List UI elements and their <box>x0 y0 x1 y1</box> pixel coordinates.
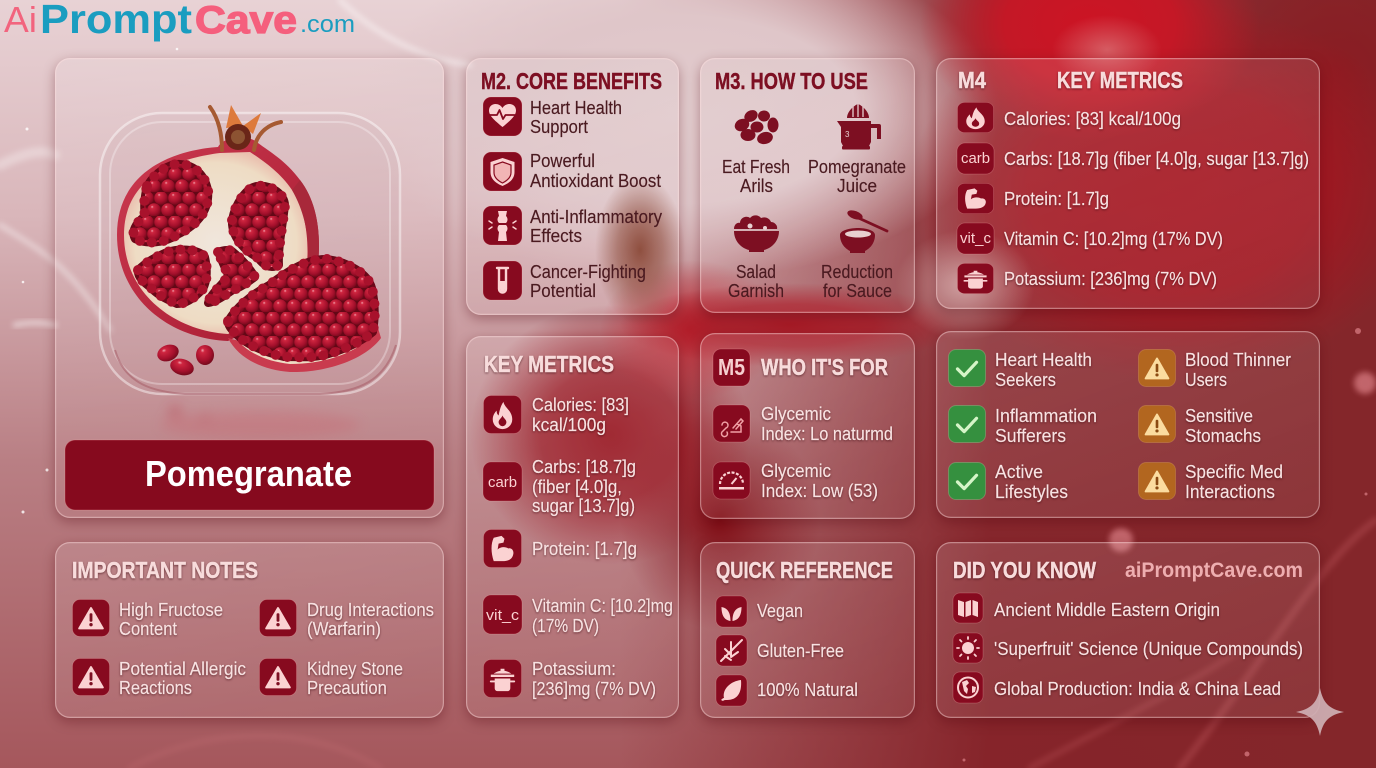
metric: vitamin c <box>483 595 673 636</box>
panel: key metrics column <box>466 336 679 718</box>
metric: calories: kcal/100g <box>532 414 606 435</box>
fact: global production <box>953 672 1281 703</box>
panel: how to use <box>700 58 915 313</box>
heading with badge: WHO IT'S FOR <box>761 354 888 380</box>
use: fresh arils: Eat Fresh <box>722 156 790 177</box>
heading: DID YOU KNOW <box>953 557 1096 583</box>
fact: global production: Global Production: India & China Lead <box>994 678 1281 699</box>
metric: calories: Calories: [83] kcal/100g <box>1004 108 1181 129</box>
heading: M4 <box>958 67 986 93</box>
use: salad: Garnish <box>728 280 784 301</box>
logo: Ai <box>4 0 37 40</box>
heading: M3. HOW TO USE <box>715 68 868 94</box>
note: allergic <box>72 658 246 698</box>
metric: carbs: Carbs: [18.7]g (fiber [4.0]g, sugar [13.7]g) <box>1004 148 1309 169</box>
metric: carbs <box>957 143 1309 174</box>
heading: QUICK REFERENCE <box>716 557 893 583</box>
metric: carbs: Carbs: [18.7]g <box>532 456 636 477</box>
item: glycemic index naturmd: Index: Lo naturmd <box>761 423 893 444</box>
use: fresh arils: Arils <box>740 175 773 196</box>
metric: potassium: Potassium: [236]mg (7% DV) <box>1004 268 1217 289</box>
metric: vitamin c: vit_c <box>486 608 519 624</box>
metric: vitamin c <box>957 223 1223 254</box>
use: salad <box>728 215 784 301</box>
use: juice: Juice <box>837 175 877 196</box>
metric: carbs: sugar [13.7]g) <box>532 495 635 516</box>
benefit: antioxidant: Powerful <box>530 150 595 171</box>
caution: blood thinner users <box>1138 349 1291 390</box>
fact: superfruit: 'Superfruit' Science (Unique Compounds) <box>994 638 1303 659</box>
good for: inflammation sufferers <box>948 405 1097 446</box>
heading <box>958 67 1183 93</box>
heading with badge: M5 <box>718 354 745 380</box>
caution: sensitive stomachs: Sensitive <box>1185 405 1253 426</box>
item: glycemic index low <box>713 460 878 501</box>
use: reduction sauce: for Sauce <box>823 280 892 301</box>
use: juice: Pomegranate <box>808 156 906 177</box>
benefit: antioxidant <box>483 150 661 191</box>
item: glycemic index naturmd: Glycemic <box>761 403 831 424</box>
name bar: Pomegranate <box>145 453 352 494</box>
metric: carbs: (fiber [4.0]g, <box>532 476 622 497</box>
benefit: anti-inflammatory: Anti-Inflammatory <box>530 206 663 227</box>
good for: active lifestyles: Lifestyles <box>995 481 1068 502</box>
metric: potassium: [236]mg (7% DV) <box>532 678 656 699</box>
good for: inflammation sufferers: Inflammation <box>995 405 1097 426</box>
note: fructose <box>72 599 223 639</box>
use: reduction sauce: Reduction <box>821 261 893 282</box>
benefit: heart health: Heart Health <box>530 97 622 118</box>
heading: KEY METRICS <box>484 351 614 377</box>
panel: key metrics top right <box>936 58 1320 309</box>
logo: Cave <box>195 0 297 42</box>
heading: M2. CORE BENEFITS <box>481 68 662 94</box>
note: fructose: High Fructose <box>119 599 223 620</box>
panel: core benefits <box>466 58 679 315</box>
note: kidney stone <box>259 658 403 698</box>
100% natural <box>716 675 858 706</box>
note: allergic: Potential Allergic <box>119 658 246 679</box>
caution: specific med interactions <box>1138 461 1283 502</box>
metric: potassium: Potassium: <box>532 658 616 679</box>
benefit: cancer-fighting <box>483 261 646 301</box>
panel: hero pomegranate <box>55 58 444 518</box>
vegan: Vegan <box>757 600 803 621</box>
metric: protein <box>483 529 637 568</box>
metric: carbs: carb <box>488 475 517 491</box>
panel: did you know <box>936 542 1320 718</box>
note: drug interactions <box>259 599 434 639</box>
benefit: anti-inflammatory <box>483 206 663 246</box>
note: kidney stone: Kidney Stone <box>307 658 403 679</box>
note: kidney stone: Precaution <box>307 677 387 698</box>
metric: vitamin c: vit_c <box>960 231 991 247</box>
benefit: cancer-fighting: Potential <box>530 280 596 301</box>
metric: carbs <box>483 456 636 516</box>
good for: active lifestyles: Active <box>995 461 1043 482</box>
benefit: heart health <box>483 97 622 137</box>
metric: protein: Protein: [1.7]g <box>532 538 637 559</box>
item: glycemic index low: Index: Low (53) <box>761 480 878 501</box>
metric: carbs: carb <box>961 151 990 167</box>
heading: IMPORTANT NOTES <box>72 557 258 583</box>
logo: .com <box>300 11 355 38</box>
use: reduction sauce <box>821 209 893 301</box>
good for: heart health seekers: Heart Health <box>995 349 1092 370</box>
use: juice <box>808 104 906 196</box>
benefit: heart health: Support <box>530 116 588 137</box>
gluten-free: Gluten-Free <box>757 640 844 661</box>
metric: protein: Protein: [1.7]g <box>1004 188 1109 209</box>
note: drug interactions: (Warfarin) <box>307 618 381 639</box>
metric: vitamin c: (17% DV) <box>532 615 599 636</box>
site name: aiPromptCave.com <box>1125 559 1303 582</box>
use: salad: Salad <box>736 261 776 282</box>
caution: blood thinner users: Blood Thinner <box>1185 349 1291 370</box>
caution: sensitive stomachs: Stomachs <box>1185 425 1261 446</box>
metric: potassium <box>483 658 656 699</box>
caution: sensitive stomachs <box>1138 405 1261 446</box>
benefit: cancer-fighting: Cancer-Fighting <box>530 261 646 282</box>
item: glycemic index naturmd <box>713 403 893 444</box>
fact: origin: Ancient Middle Eastern Origin <box>994 599 1220 620</box>
panel: who it's for <box>700 333 915 519</box>
metric: protein <box>957 183 1109 214</box>
caution: blood thinner users: Users <box>1185 369 1227 390</box>
note: fructose: Content <box>119 618 177 639</box>
fact: superfruit <box>953 633 1303 663</box>
panel: important notes <box>55 542 444 718</box>
good for: inflammation sufferers: Sufferers <box>995 425 1066 446</box>
good for: active lifestyles <box>948 461 1068 502</box>
use: fresh arils <box>722 108 790 196</box>
panel: quick reference <box>700 542 915 718</box>
panel: suitability <box>936 331 1320 518</box>
100% natural: 100% Natural <box>757 679 858 700</box>
item: glycemic index low: Glycemic <box>761 460 831 481</box>
fact: origin <box>953 593 1220 623</box>
note: drug interactions: Drug Interactions <box>307 599 434 620</box>
good for: heart health seekers <box>948 349 1092 390</box>
heading: KEY METRICS <box>1057 67 1183 93</box>
metric: calories <box>483 394 629 435</box>
metric: vitamin c: Vitamin C: [10.2]mg <box>532 595 673 616</box>
good for: heart health seekers: Seekers <box>995 369 1056 390</box>
note: allergic: Reactions <box>119 677 192 698</box>
benefit: antioxidant: Antioxidant Boost <box>530 170 661 191</box>
use: juice: 3 <box>845 130 850 139</box>
vegan <box>716 596 803 627</box>
gluten-free <box>716 635 844 666</box>
benefit: anti-inflammatory: Effects <box>530 225 582 246</box>
caution: specific med interactions: Interactions <box>1185 481 1275 502</box>
caution: specific med interactions: Specific Med <box>1185 461 1283 482</box>
name bar <box>65 440 434 510</box>
heading with badge <box>713 349 888 386</box>
metric: calories: Calories: [83] <box>532 394 629 415</box>
glass dish and fruit illustration <box>100 105 400 439</box>
metric: potassium <box>957 263 1217 294</box>
metric: calories <box>957 102 1181 133</box>
metric: vitamin c: Vitamin C: [10.2]mg (17% DV) <box>1004 228 1223 249</box>
